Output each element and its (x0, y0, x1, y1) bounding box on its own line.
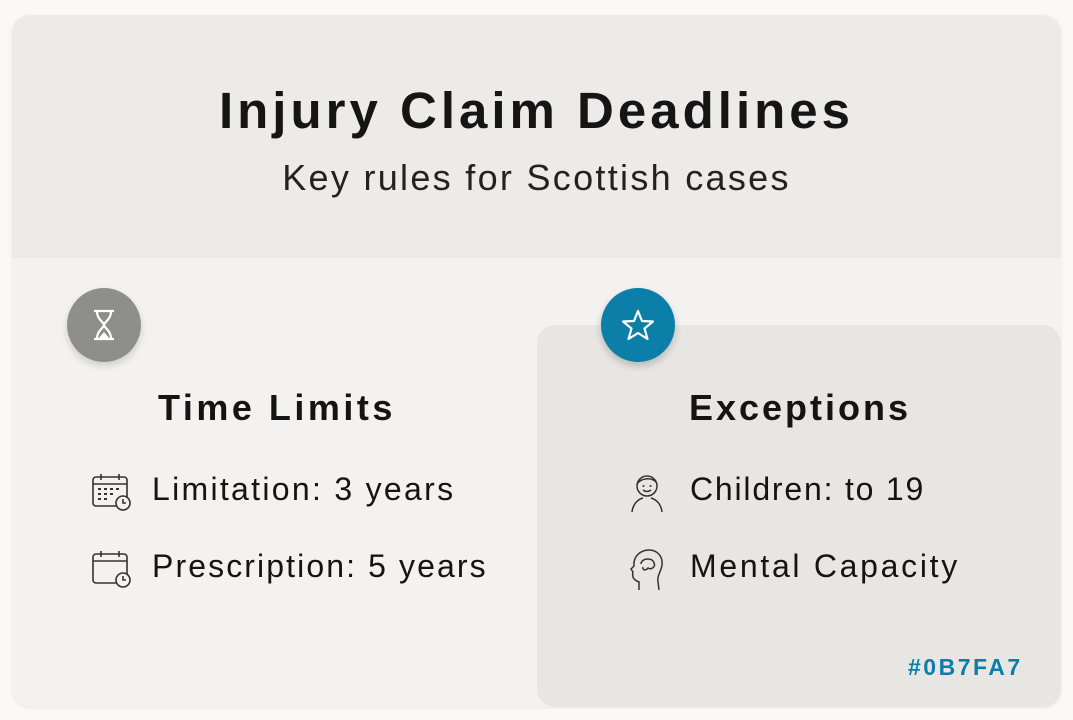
item: limitation: Limitation: 3 years (152, 471, 455, 507)
item: children (631, 471, 925, 512)
header band (12, 15, 1061, 258)
icon: head brain (630, 549, 663, 590)
icon: hourglass (67, 288, 141, 362)
item: mental capacity: Mental Capacity (690, 548, 960, 584)
item: mental capacity (630, 548, 960, 590)
icon: calendar grid (92, 474, 131, 511)
title: Injury Claim Deadlines (219, 82, 854, 139)
item: children: Children: to 19 (690, 471, 925, 507)
panel: time limits (64, 288, 488, 588)
icon: calendar clock (92, 551, 131, 588)
heading: Time Limits: Time Limits (158, 387, 396, 428)
item: prescription: Prescription: 5 years (152, 548, 488, 584)
panel: exceptions background (537, 325, 1061, 707)
color code label: #0B7FA7 (908, 654, 1023, 680)
subtitle: Key rules for Scottish cases (282, 157, 791, 198)
icon: star (601, 288, 675, 362)
icon: child (631, 475, 663, 512)
heading: Exceptions: Exceptions (689, 387, 911, 428)
panel: exceptions (598, 288, 1023, 680)
